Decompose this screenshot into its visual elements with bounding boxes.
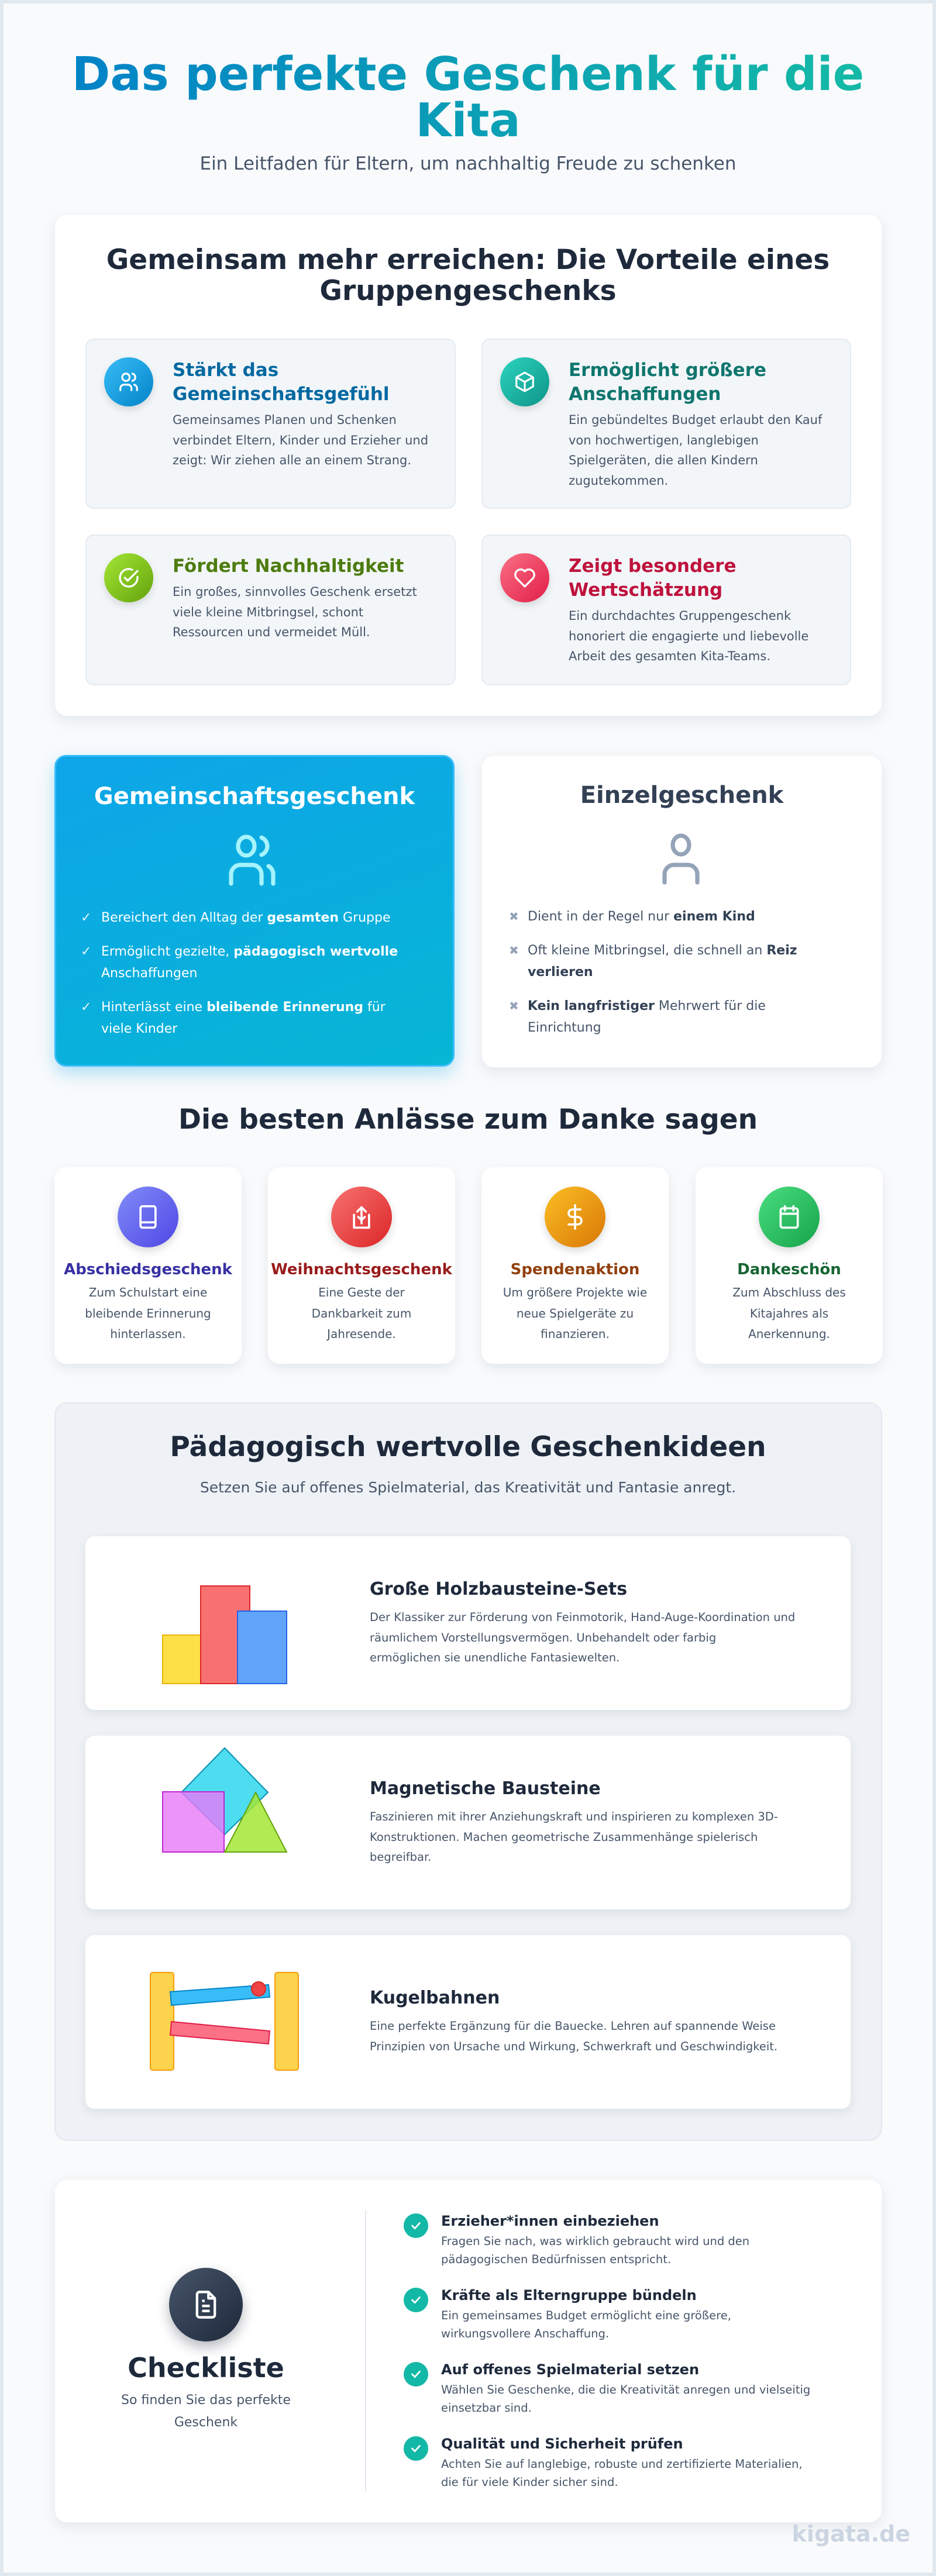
item 3: Auf offenes Spielmaterial setzen: [441, 2361, 699, 2378]
icon: gift: [331, 1187, 392, 1247]
list: drawbacks: ✖: [509, 999, 519, 1013]
icon: check circle: [104, 553, 153, 602]
occasion: Abschiedsgeschenk: [54, 1167, 242, 1364]
benefit: Wertschätzung: Ein durchdachtes Gruppengeschenk honoriert die engagierte und liebevolle Arbeit des gesamten Kita-Teams.: [569, 609, 808, 663]
icon: dollar: [545, 1187, 605, 1247]
idea: Holzbausteine: Große Holzbausteine-Sets: [370, 1579, 627, 1599]
idea: Magnetische Bausteine: [85, 1736, 851, 1909]
list: drawbacks: Dient in der Regel nur einem Kind: [528, 909, 755, 924]
title: [0, 51, 936, 144]
list: benefits: ✓: [81, 911, 91, 925]
benefit: größere Anschaffungen: [481, 339, 851, 509]
item 2: Ein gemeinsames Budget ermöglicht eine größere,: [441, 2309, 731, 2322]
benefit: Nachhaltigkeit: Fördert Nachhaltigkeit: [173, 556, 404, 577]
item 4: Qualität und Sicherheit prüfen: [441, 2436, 683, 2452]
idea: Holzbausteine: Der Klassiker zur Förderung von Feinmotorik, Hand-Auge-Koordination und räumlichem Vorstellungsvermögen. Unbehandelt oder farbig: [370, 1611, 795, 1644]
idea: Holzbausteine: [85, 1536, 851, 1710]
item 2: wirkungsvollere Anschaffung.: [441, 2327, 609, 2340]
text: Checkliste subtitle: So finden Sie das perfekte Geschenk: [121, 2393, 291, 2430]
checklist items: [404, 2213, 810, 2489]
item 4: Achten Sie auf langlebige, robuste und zertifizierte Materialien,: [441, 2457, 803, 2471]
title: Das perfekte Geschenk für die: [72, 47, 864, 101]
occasion: Spendenaktion: Um größere Projekte wie neue Spielgeräte zu finanzieren.: [503, 1285, 647, 1341]
idea: Kugelbahnen: Eine perfekte Ergänzung für die Bauecke. Lehren auf spannende Weise Prinzipien von Ursache und Wirkung, Schwerkraft und Geschwindigkeit.: [370, 2019, 777, 2053]
list: drawbacks: Oft kleine Mitbringsel, die schnell an Reiz verlieren: [528, 943, 797, 980]
item 2: [404, 2287, 731, 2340]
benefit: Wertschätzung: [481, 534, 851, 685]
benefit: größere Anschaffungen: Ein gebündeltes Budget erlaubt den Kauf von hochwertigen, langlebigen Spielgeräten, die allen Kindern zugutekommen.: [569, 413, 822, 488]
list: benefits: Bereichert den Alltag der gesamten Gruppe: [101, 911, 391, 925]
item 1: [404, 2213, 749, 2266]
list: drawbacks: Kein langfristiger Mehrwert für die Einrichtung: [528, 999, 766, 1035]
list: drawbacks: ✖: [509, 943, 519, 957]
occasion: Weihnachtsgeschenk: Eine Geste der Dankbarkeit zum Jahresende.: [312, 1285, 411, 1341]
panel: Checkliste: [54, 2179, 882, 2523]
list: drawbacks: [509, 909, 797, 1035]
occasion: Dankeschön: Dankeschön: [737, 1261, 841, 1278]
list: benefits: ✓: [81, 1000, 91, 1015]
benefit: Wertschätzung: Wertschätzung: [569, 580, 722, 601]
panel: Geschenkideen: [54, 1402, 882, 2141]
panel: Vorteile: [54, 214, 882, 716]
occasion: Abschiedsgeschenk: Zum Schulstart eine bleibende Erinnerung hinterlassen.: [85, 1285, 211, 1341]
subtitle: Ein Leitfaden für Eltern, um nachhaltig Freude zu schenken: [199, 153, 737, 174]
heading: Checkliste: Checkliste: [128, 2352, 284, 2384]
list: benefits: [81, 911, 398, 1036]
icon: group: [229, 834, 276, 886]
subtitle: Geschenkideen: Setzen Sie auf offenes Spielmaterial, das Kreativität und Fantasie anregt.: [200, 1479, 736, 1496]
list: drawbacks: ✖: [509, 909, 519, 923]
benefit: Gemeinschaftsgefühl: Stärkt das: [173, 360, 278, 381]
item 1: Erzieher*innen einbeziehen: [441, 2213, 659, 2229]
benefit: Wertschätzung: Zeigt besondere: [569, 556, 736, 577]
benefit: Nachhaltigkeit: Ein großes, sinnvolles Geschenk ersetzt viele kleine Mitbringsel, schont: [173, 585, 417, 619]
item 1: Fragen Sie nach, was wirklich gebraucht wird und den pädagogischen Bedürfnissen entspricht.: [441, 2234, 749, 2266]
heading: Vorteile: Gruppengeschenks: [319, 275, 617, 307]
item 4: die für viele Kinder sicher sind.: [441, 2475, 618, 2489]
title: Kita: [415, 94, 521, 147]
item 4: [404, 2436, 803, 2489]
occasion: Weihnachtsgeschenk: Weihnachtsgeschenk: [271, 1261, 452, 1278]
icon: book: [118, 1187, 178, 1247]
occasion: Spendenaktion: [481, 1167, 669, 1364]
occasion: Abschiedsgeschenk: Abschiedsgeschenk: [64, 1261, 232, 1278]
list: benefits: ✓: [81, 944, 91, 959]
occasion: Dankeschön: [696, 1167, 883, 1364]
heading: Gemeinschaftsgeschenk: [94, 783, 415, 810]
panel: Gemeinschaftsgeschenk: [54, 755, 455, 1067]
benefit: Nachhaltigkeit: Ressourcen und vermeidet Müll.: [173, 625, 370, 639]
icon: people: [104, 357, 153, 406]
item 2: Kräfte als Elterngruppe bündeln: [441, 2287, 697, 2303]
benefit: größere Anschaffungen: Anschaffungen: [569, 384, 721, 405]
icon: person: [662, 833, 700, 885]
illustration: marble run: [150, 1972, 299, 2071]
icon: heart: [500, 553, 549, 602]
idea: Kugelbahnen: [85, 1935, 851, 2109]
benefit: größere Anschaffungen: Ermöglicht größere: [569, 360, 766, 381]
heading: Vorteile: [106, 244, 830, 307]
occasion: Weihnachtsgeschenk: [268, 1167, 455, 1364]
heading: Anlässe: Die besten Anlässe zum Danke sagen: [178, 1103, 758, 1136]
item 3: Wählen Sie Geschenke, die die Kreativität anregen und vielseitig einsetzbar sind.: [441, 2383, 810, 2415]
benefit: Gemeinschaftsgefühl: [85, 339, 456, 509]
idea: Holzbausteine: ermöglichen sie unendliche Fantasiewelten.: [370, 1651, 620, 1664]
icon: document: [169, 2268, 243, 2341]
heading: Vorteile: Gemeinsam mehr erreichen: Die Vorteile eines: [106, 244, 830, 276]
idea: Magnetische Bausteine: Faszinieren mit ihrer Anziehungskraft und inspirieren zu komplexen 3D-Konstruktionen. Machen geometrische Zusammenhänge spielerisch begreifbar.: [370, 1810, 778, 1864]
benefit: Gemeinschaftsgefühl: Gemeinsames Planen und Schenken verbindet Eltern, Kinder und Erzieher und zeigt: Wir ziehen alle an einem Strang.: [173, 413, 428, 467]
panel: Einzelgeschenk: [481, 755, 882, 1068]
list: benefits: Hinterlässt eine bleibende Erinnerung für viele Kinder: [101, 1000, 386, 1036]
occasion: Spendenaktion: Spendenaktion: [511, 1261, 639, 1278]
benefit: Gemeinschaftsgefühl: Gemeinschaftsgefühl: [173, 384, 390, 405]
occasion: Dankeschön: Zum Abschluss des Kitajahres als Anerkennung.: [732, 1285, 846, 1341]
idea: Magnetische Bausteine: Magnetische Bausteine: [370, 1778, 601, 1799]
illustration: blocks: [162, 1585, 287, 1684]
idea: Kugelbahnen: Kugelbahnen: [370, 1988, 500, 2008]
item 3: [404, 2361, 810, 2415]
list: benefits: Ermöglicht gezielte, pädagogisch wertvolle Anschaffungen: [101, 944, 398, 981]
watermark: kigata.de: kigata.de: [792, 2521, 910, 2547]
icon: calendar: [759, 1187, 820, 1247]
heading: Geschenkideen: Pädagogisch wertvolle Geschenkideen: [170, 1431, 766, 1463]
benefit: Nachhaltigkeit: [85, 534, 456, 685]
heading: Einzelgeschenk: [580, 782, 783, 809]
illustration: magnetic shapes: [162, 1747, 288, 1853]
icon: cube: [500, 357, 549, 406]
